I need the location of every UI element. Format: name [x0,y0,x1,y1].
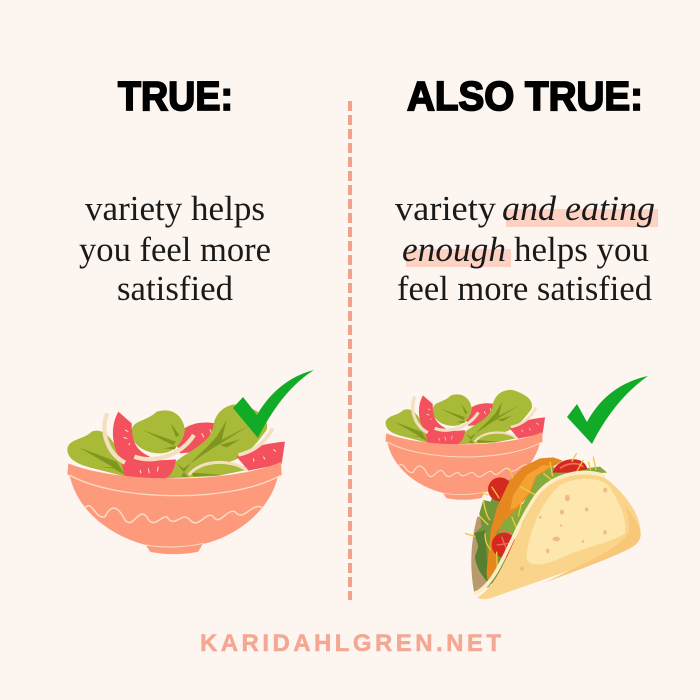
divider [348,101,352,600]
right text block: and eating [502,189,655,228]
left text block [79,189,271,308]
lettuce: top [498,467,607,537]
left text block: variety helps [85,189,265,228]
taco meat [487,457,563,584]
footer: website: KARIDAHLGREN.NET [200,630,501,657]
right text block: enough [402,230,506,269]
illustration: taco [465,453,641,599]
right text block [395,189,658,308]
shredded cheese [465,453,596,572]
icon: check mark right [567,376,648,444]
highlight: enough [406,249,511,267]
illustration: salad bowl right [386,390,545,500]
left text block: satisfied [117,269,233,308]
tomato: lower [492,533,516,557]
heading: ALSO TRUE: ALSO TRUE: [407,73,643,119]
tomato: top [553,459,587,473]
taco shell [477,473,641,599]
illustration: salad bowl left [67,404,285,554]
right text block: helps you [514,230,649,269]
right text block: feel more satisfied [397,269,652,308]
lettuce [474,480,510,585]
right text block: variety [395,189,497,228]
tomato: upper left [488,477,512,501]
taco back shell [471,517,490,592]
icon: check mark left [233,370,314,438]
shell spots [520,487,607,571]
left text block: you feel more [79,230,271,269]
heading: TRUE: TRUE: [118,73,233,119]
highlight: and eating [506,209,658,227]
